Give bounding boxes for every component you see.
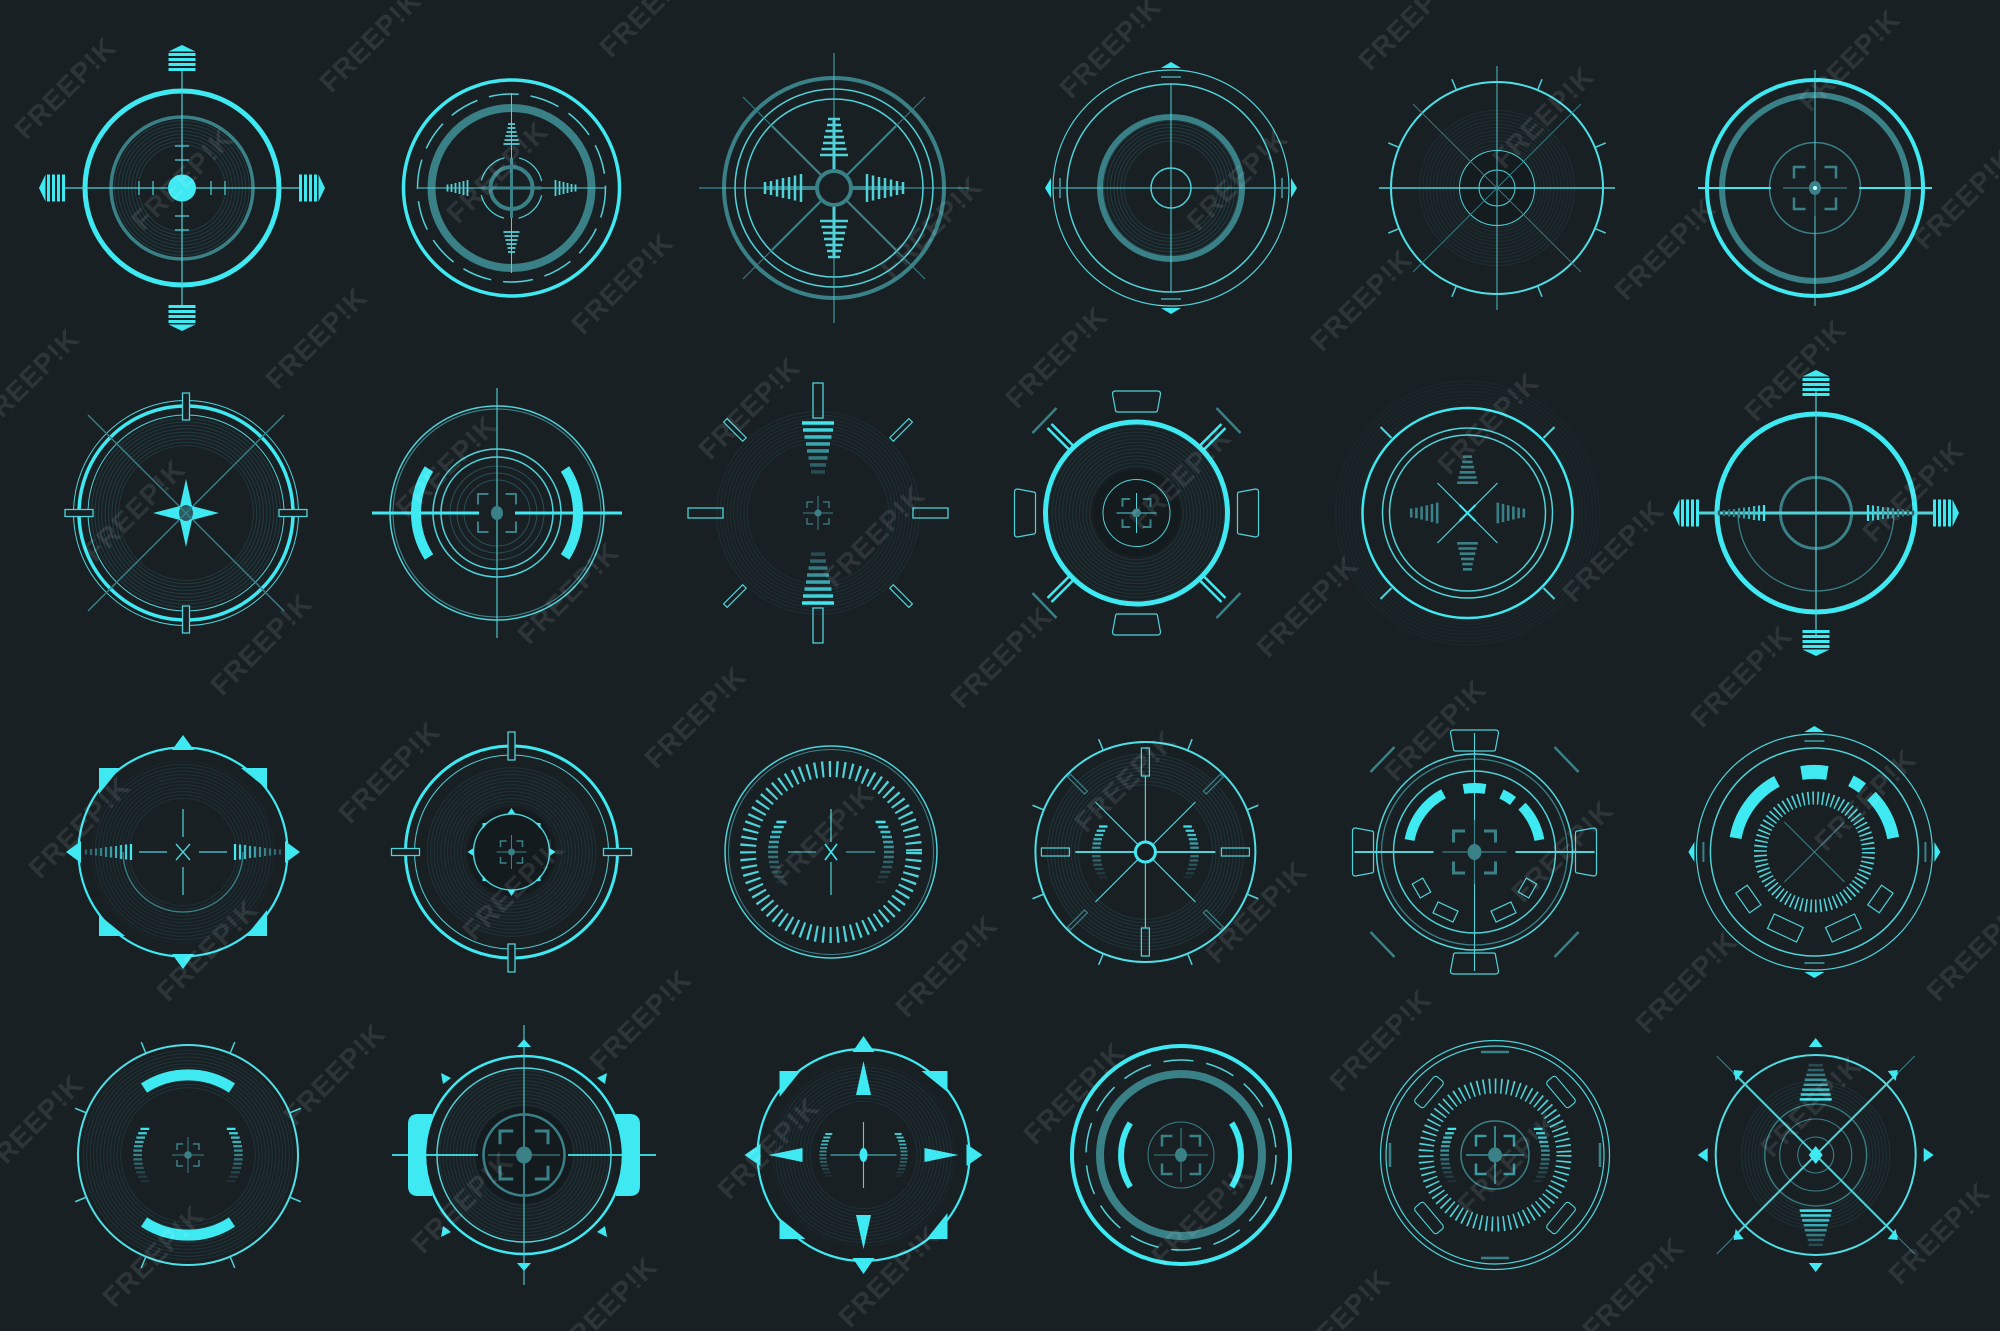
watermarks: FREEP!K (1431, 366, 1545, 480)
watermarks: FREEP!K (944, 600, 1058, 714)
watermarks: FREEP!K (1323, 983, 1437, 1097)
watermarks: FREEP!K (583, 963, 697, 1077)
watermarks: FREEP!K (638, 660, 752, 774)
watermarks: FREEP!K (1856, 434, 1970, 548)
watermarks: FREEP!K (440, 115, 554, 229)
reticle: row 3 column 2 (392, 732, 632, 972)
watermarks: FREEP!K (204, 587, 318, 701)
watermarks: FREEP!K (817, 479, 931, 593)
reticle: row 1 column 2 (404, 80, 620, 296)
watermarks: FREEP!K (1145, 1157, 1259, 1271)
watermarks: FREEP!K (405, 1145, 519, 1259)
radial tick ring (748, 769, 914, 935)
watermarks: FREEP!K (96, 1199, 210, 1313)
watermarks: FREEP!K (1017, 1036, 1131, 1150)
watermarks: FREEP!K (1199, 855, 1313, 969)
watermarks: FREEP!K (1180, 122, 1294, 236)
compass blades (768, 1061, 958, 1249)
watermarks: FREEP!K (1882, 1176, 1996, 1290)
watermarks: FREEP!K (1068, 724, 1182, 838)
watermarks: FREEP!K (125, 122, 239, 236)
watermarks: FREEP!K (332, 715, 446, 829)
watermarks: FREEP!K (1792, 3, 1906, 117)
reticle: row 3 column 4 (1033, 739, 1258, 965)
watermarks: FREEP!K (456, 832, 570, 946)
watermarks: FREEP!K (766, 778, 880, 892)
watermarks: FREEP!K (1378, 673, 1492, 787)
reticle: row 4 column 1 (75, 1042, 301, 1268)
watermarks: FREEP!K (874, 170, 988, 284)
reticle: row 3 column 5 (1352, 730, 1596, 974)
watermarks: FREEP!K (1608, 192, 1722, 306)
thick arcs (144, 1075, 232, 1235)
watermarks: FREEP!K (832, 1219, 946, 1331)
reticle: row 4 column 4 (1072, 1046, 1290, 1264)
watermarks: FREEP!K (1629, 925, 1743, 1039)
center dot (168, 174, 196, 202)
watermarks: FREEP!K (889, 909, 1003, 1023)
reticle: row 1 column 1 (39, 45, 325, 331)
watermarks: FREEP!K (1451, 1106, 1565, 1220)
reticle: row 2 column 4 (1014, 391, 1258, 635)
reticle: row 3 column 6 (1688, 726, 1940, 978)
thick dim ring (432, 108, 592, 268)
reticle: row 2 column 5 (1348, 393, 1588, 633)
reticle: row 1 column 4 (1045, 62, 1297, 314)
watermarks: FREEP!K (1304, 243, 1418, 357)
reticle: row 2 column 1 (65, 393, 307, 633)
reticle: row 1 column 5 (1379, 66, 1615, 310)
watermarks: FREEP!K (22, 770, 136, 884)
reticle: row 2 column 2 (372, 388, 622, 638)
watermarks: FREEP!K (77, 453, 191, 567)
reticle: row 2 column 6 (1673, 370, 1959, 656)
watermarks: FREEP!K (1738, 313, 1852, 427)
watermarks: FREEP!K (389, 409, 503, 523)
watermarks: FREEP!K (150, 893, 264, 1007)
watermarks: FREEP!K (1754, 1049, 1868, 1163)
watermarks: FREEP!K (711, 1091, 825, 1205)
reticle: row 1 column 3 (699, 53, 969, 323)
watermarks: FREEP!K (8, 31, 122, 145)
watermarks: FREEP!K (1123, 421, 1237, 535)
reticle: row 3 column 3 (725, 746, 937, 958)
reticle: row 2 column 3 (688, 383, 948, 643)
reticle: row 1 column 6 (1698, 70, 1932, 306)
reticle: row 3 column 1 (66, 735, 300, 969)
watermarks: FREEP!K (1684, 619, 1798, 733)
watermarks: FREEP!K (1505, 794, 1619, 908)
reticle: row 4 column 3 (744, 1036, 982, 1274)
watermarks: FREEP!K (1556, 494, 1670, 608)
watermarks: FREEP!K (1250, 549, 1364, 663)
watermarks: FREEP!K (277, 1017, 391, 1131)
watermarks: FREEP!K (1808, 743, 1922, 857)
watermarks: FREEP!K (1486, 60, 1600, 174)
reticle: row 4 column 6 (1698, 1038, 1934, 1272)
watermarks: FREEP!K (565, 226, 679, 340)
watermarks: FREEP!K (692, 351, 806, 465)
watermarks: FREEP!K (999, 300, 1113, 414)
four-point star (153, 479, 219, 547)
reticle: row 4 column 5 (1380, 1040, 1610, 1270)
watermarks: FREEP!K (259, 281, 373, 395)
watermarks: FREEP!K (511, 536, 625, 650)
reticle: row 4 column 2 (392, 1025, 656, 1285)
side pads (408, 1114, 640, 1196)
outer ring (85, 91, 279, 285)
